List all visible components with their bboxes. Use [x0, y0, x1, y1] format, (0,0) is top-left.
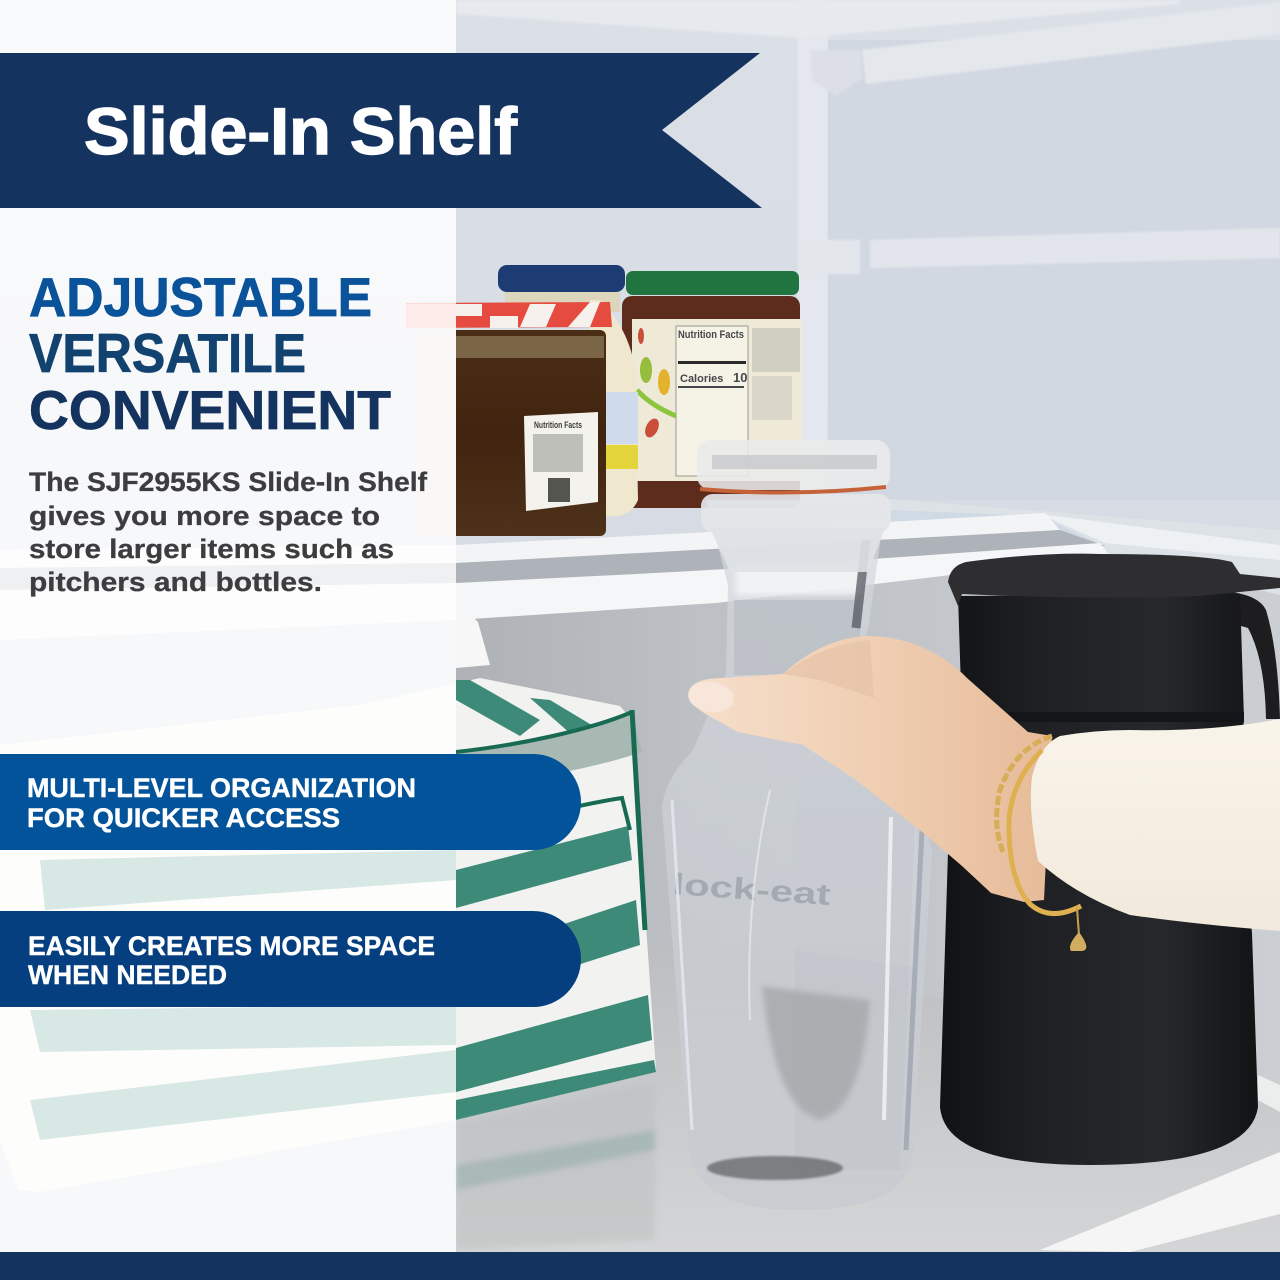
- jar: green lid fruit spread: Calories: [680, 373, 723, 385]
- jar: blue lid mayonnaise: [498, 265, 638, 516]
- headline stack: ADJUSTABLE: [29, 266, 372, 328]
- gold bangle and charm: [1009, 750, 1086, 951]
- translucent white side panel: [0, 0, 456, 1252]
- headline stack: VERSATILE: [29, 322, 306, 384]
- gold bracelets: [997, 736, 1052, 852]
- carafe neck and rim: [697, 440, 891, 572]
- right side wall panel: [456, 0, 1280, 500]
- jar: gingham lid jam: [406, 302, 612, 536]
- jar: green lid fruit spread: 10: [733, 370, 747, 385]
- feature pill: multi-level organization: [0, 754, 581, 850]
- bottom bar: [0, 1252, 1280, 1280]
- jar: green lid fruit spread: [622, 271, 802, 508]
- feature pill: multi-level organization: FOR QUICKER ACCESS: [27, 803, 340, 833]
- body description: [29, 467, 428, 597]
- jam label text: Nutrition Facts: [534, 420, 582, 430]
- label text: Nutrition Facts: [678, 329, 744, 341]
- shelf white front edge: [1040, 1152, 1280, 1252]
- title text: Slide-In Shelf: [84, 94, 518, 168]
- feature pill: multi-level organization: MULTI-LEVEL ORGANIZATION: [27, 773, 416, 803]
- lower-left shelf white corner: [456, 600, 490, 668]
- body description: pitchers and bottles.: [29, 567, 322, 597]
- lower compartment back wall: [456, 555, 1280, 1110]
- upper fridge wall: [0, 0, 1280, 640]
- hand gripping carafe: [686, 636, 1052, 902]
- cream sleeve: [1031, 719, 1280, 931]
- lower shelf surface: [456, 945, 1280, 1252]
- lighter block seen behind carafe: [795, 781, 917, 968]
- upper shelf with glass: [0, 492, 1280, 640]
- headline stack: CONVENIENT: [29, 379, 391, 441]
- reflection of bag on lower shelf: [456, 1082, 655, 1250]
- title ribbon: [0, 53, 762, 208]
- body description: The SJF2955KS Slide-In Shelf: [29, 467, 428, 497]
- insulated lunch bag: [0, 678, 656, 1192]
- lower shelf right white rail: [1258, 1075, 1280, 1112]
- embossed brand: lock-eat: [672, 868, 831, 912]
- feature pill: creates more space: WHEN NEEDED: [28, 960, 227, 990]
- headline stack: [29, 266, 391, 441]
- feature pill: creates more space: [0, 911, 581, 1007]
- body description: store larger items such as: [29, 534, 394, 564]
- body description: gives you more space to: [29, 501, 380, 531]
- glass carafe with water: [662, 440, 932, 1210]
- black thermal pitcher: [940, 554, 1280, 1165]
- feature pill: creates more space: EASILY CREATES MORE SPACE: [28, 931, 435, 961]
